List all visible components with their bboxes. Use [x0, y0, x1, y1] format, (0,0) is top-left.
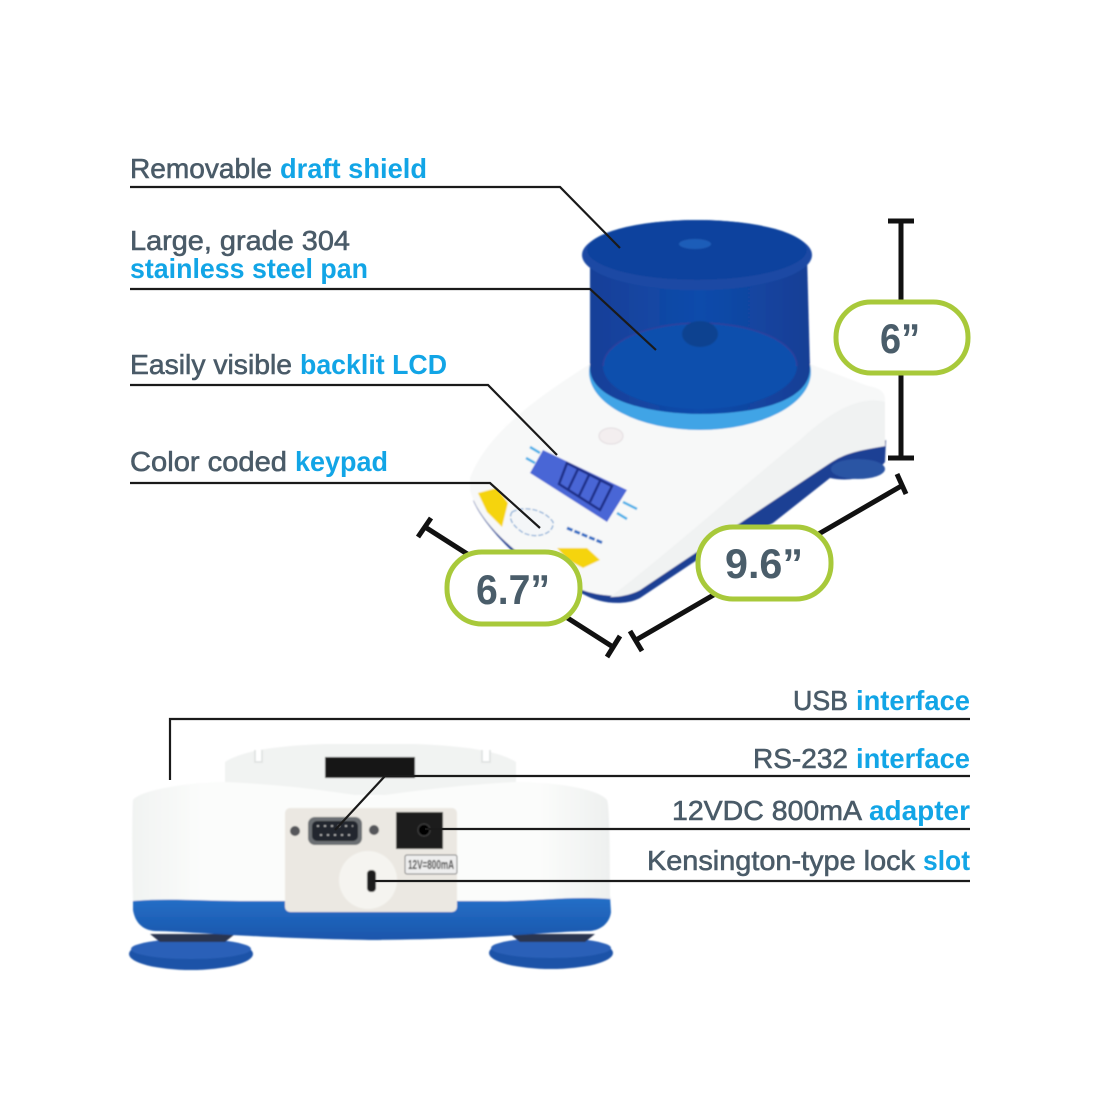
light blue pan ring	[589, 314, 811, 430]
dimension: height 6 inches: 6”	[880, 315, 920, 362]
callout: backlit LCD: backlit LCD	[300, 349, 447, 380]
dimension: depth 6.7 inches: 6.7”	[476, 566, 550, 613]
foot	[831, 459, 885, 479]
left foot	[129, 938, 253, 970]
black USB port block	[325, 757, 415, 778]
callout: keypad	[130, 446, 540, 528]
connector screws	[290, 826, 300, 836]
callout: keypad: keypad	[295, 446, 388, 477]
brand mark	[567, 528, 603, 543]
LCD display	[530, 450, 627, 522]
callout: draft shield: Removable	[130, 153, 272, 184]
body front shade	[610, 400, 885, 597]
callout: RS-232 interface	[335, 743, 970, 830]
collar notches	[255, 750, 490, 762]
rear collar	[225, 744, 516, 795]
scale white body	[470, 364, 885, 596]
callout: lock slot: Kensington-type lock	[647, 845, 916, 876]
dimension: width 9.6 inches: 9.6”	[725, 540, 803, 587]
photo: balance with draft shield	[470, 220, 886, 603]
callout: power adapter	[425, 795, 970, 829]
voltage label	[405, 855, 457, 874]
scale base shadow band	[473, 440, 886, 603]
callout: USB interface: USB	[793, 685, 848, 716]
blue base band	[133, 896, 611, 940]
white body	[132, 782, 610, 901]
callout: backlit LCD: Easily visible	[130, 349, 292, 380]
photo: rear view of balance	[129, 744, 613, 970]
power adapter socket	[396, 812, 443, 849]
dimension: width 9.6 inches	[630, 474, 906, 651]
lock cover	[339, 851, 397, 909]
callout: backlit LCD	[130, 349, 557, 455]
callout: stainless steel pan: Large, grade 304	[130, 225, 350, 256]
right foot	[489, 937, 613, 969]
callout: RS-232 interface: interface	[856, 743, 970, 774]
callout: lock slot	[372, 845, 970, 881]
LCD blue tick marks	[526, 447, 637, 519]
callout: power adapter: adapter	[869, 795, 970, 826]
lid	[582, 220, 812, 290]
yellow keypad buttons	[478, 488, 508, 527]
inner floor of the shield	[603, 323, 797, 409]
callout: stainless steel pan	[130, 225, 656, 350]
callout: draft shield	[130, 153, 620, 248]
callout: USB interface	[170, 685, 970, 780]
callout: power adapter: 12VDC 800mA	[672, 795, 862, 826]
callout: draft shield: draft shield	[280, 153, 427, 184]
callout: lock slot: slot	[923, 845, 970, 876]
RS-232 D-sub connector	[308, 817, 362, 845]
Kensington slot	[367, 870, 376, 892]
draft shield cylinder	[590, 255, 810, 414]
keypad	[510, 509, 553, 536]
callout: RS-232 interface: RS-232	[753, 743, 848, 774]
voltage label: 12V=800mA	[408, 857, 454, 872]
rear connector panel	[285, 808, 457, 912]
foot stems	[150, 934, 595, 942]
dimension: height 6 inches	[836, 221, 968, 458]
callout: USB interface: interface	[856, 685, 970, 716]
callout: stainless steel pan: stainless steel pan	[130, 253, 368, 284]
status bubble	[599, 428, 623, 444]
dimension: depth 6.7 inches	[418, 518, 620, 657]
shield centre post	[682, 321, 718, 347]
callout: keypad: Color coded	[130, 446, 287, 477]
LCD digits	[559, 463, 612, 510]
